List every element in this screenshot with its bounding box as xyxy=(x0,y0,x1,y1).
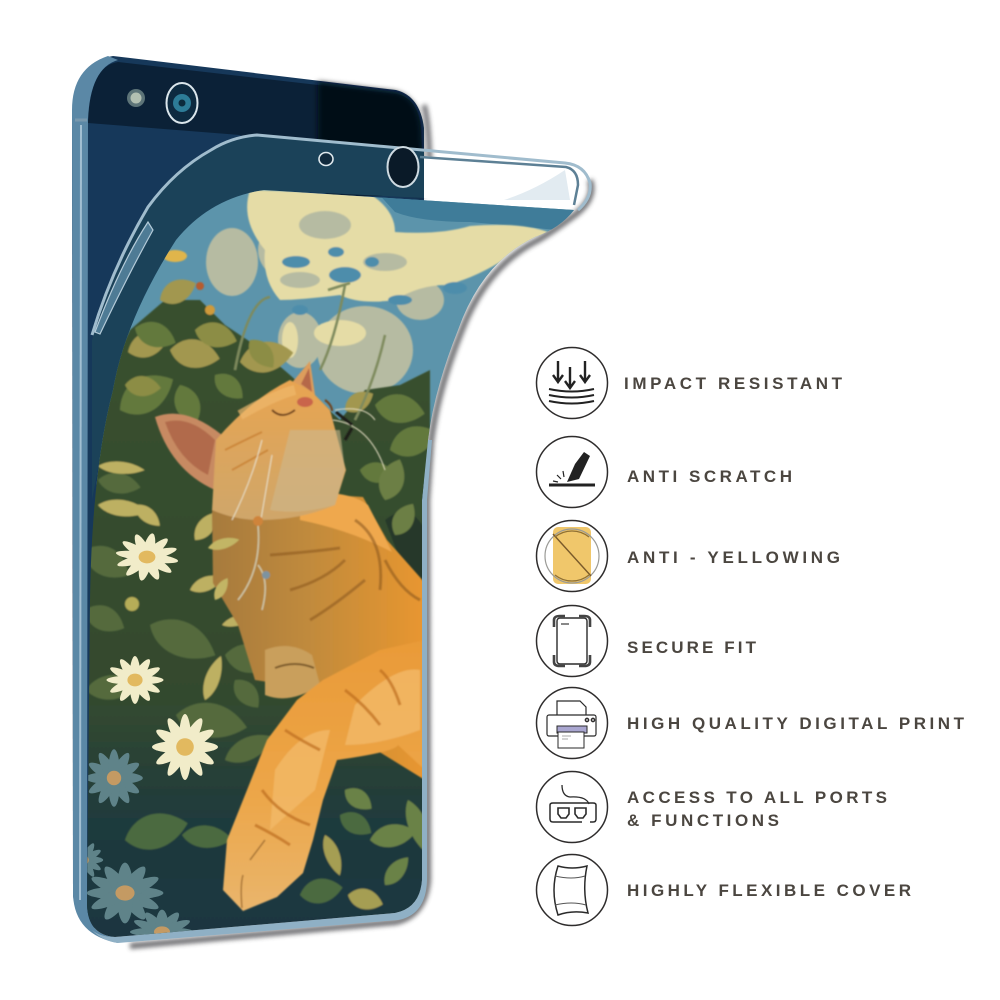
upper left foliage leaves xyxy=(124,273,377,418)
foreground arm xyxy=(223,640,425,911)
feature: flexible cover xyxy=(536,854,911,926)
drop shadow xyxy=(130,105,591,946)
label: ANTI SCRATCH xyxy=(627,467,792,486)
case camera hole xyxy=(388,147,418,187)
feature: high quality print xyxy=(536,688,965,758)
icon: ports xyxy=(536,772,608,842)
feature: secure fit xyxy=(536,606,757,676)
leaves over chest xyxy=(208,537,240,601)
shoulder highlight xyxy=(300,493,392,552)
clouds xyxy=(206,190,548,394)
daisies xyxy=(116,533,178,581)
camera lens xyxy=(166,83,198,123)
label: IMPACT RESISTANT xyxy=(624,374,843,393)
cat body xyxy=(155,361,425,911)
feature: impact resistant xyxy=(536,348,843,418)
printed artwork: sleeping orange cat xyxy=(65,185,580,954)
dark reflection xyxy=(318,82,424,196)
icon: printer xyxy=(536,688,608,758)
rear paw xyxy=(265,646,320,698)
case top window xyxy=(424,156,574,207)
left middle leaves xyxy=(89,473,270,764)
body and chest xyxy=(212,492,425,780)
case dark body xyxy=(92,135,424,500)
paw toes xyxy=(241,840,265,908)
case outer edge xyxy=(92,135,590,335)
feature: anti scratch xyxy=(536,436,792,508)
phone back dark top band xyxy=(88,62,424,196)
orange flower sprig xyxy=(238,525,265,610)
foliage xyxy=(78,250,442,950)
icon: scratch xyxy=(536,436,608,508)
cat head xyxy=(212,380,346,520)
lower leaves xyxy=(124,812,372,904)
icon: yellowing xyxy=(536,520,608,592)
flash xyxy=(127,89,145,107)
label: ACCESS TO ALL PORTS xyxy=(627,788,887,807)
phone back xyxy=(72,56,424,935)
label: SECURE FIT xyxy=(627,638,757,657)
label: HIGH QUALITY DIGITAL PRINT xyxy=(627,714,965,733)
chest stripes xyxy=(270,520,420,620)
phone with clear case xyxy=(72,56,591,946)
sky xyxy=(80,185,580,485)
icon: secure fit xyxy=(536,606,608,676)
icon: flexible xyxy=(536,854,608,926)
cat ear right xyxy=(290,361,315,395)
left metal edge xyxy=(72,56,118,943)
side button xyxy=(95,222,153,334)
icon: impact xyxy=(536,348,608,418)
label: ANTI - YELLOWING xyxy=(627,548,840,567)
case right edge and bottom edge xyxy=(92,440,432,943)
feature: anti yellowing xyxy=(536,520,840,592)
arm stripes xyxy=(255,670,400,845)
highlight on arm xyxy=(270,669,420,830)
feature: ports and functions xyxy=(536,772,887,842)
feature: ports and functions: & FUNCTIONS xyxy=(627,811,779,830)
cat ear left xyxy=(155,414,222,490)
label: HIGHLY FLEXIBLE COVER xyxy=(627,881,911,900)
face xyxy=(240,390,295,415)
case flash hole xyxy=(319,152,333,166)
